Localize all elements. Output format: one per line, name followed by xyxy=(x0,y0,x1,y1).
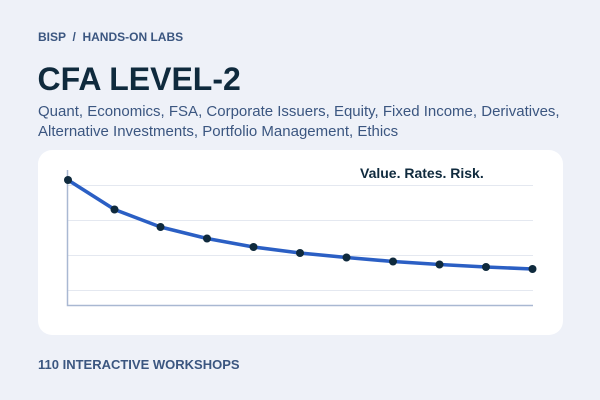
chart axes xyxy=(68,170,533,306)
chart caption: Value. Rates. Risk. xyxy=(360,165,484,181)
title: CFA LEVEL-2 xyxy=(38,61,241,97)
subtitle: topics list: Alternative Investments, Portfolio Management, Ethics xyxy=(38,123,398,140)
data line xyxy=(68,180,532,269)
panel: chart card xyxy=(38,150,563,335)
data points xyxy=(64,176,536,273)
footer: workshops count: 110 INTERACTIVE WORKSHOPS xyxy=(38,357,240,372)
eyebrow: brand line: BISP / HANDS-ON LABS xyxy=(38,30,183,44)
subtitle: topics list: Quant, Economics, FSA, Corporate Issuers, Equity, Fixed Income, Derivatives, xyxy=(38,103,560,120)
subtitle: topics list xyxy=(38,103,560,140)
